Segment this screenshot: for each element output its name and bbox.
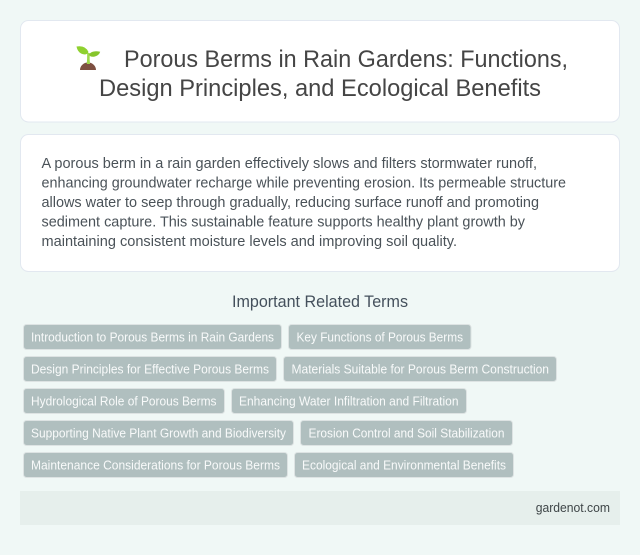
chip: materials: Materials Suitable for Porous Berm Construction (292, 362, 549, 376)
chip: water infiltration (232, 388, 466, 414)
footer source text: gardenot.com (536, 501, 610, 515)
chip: erosion control (300, 420, 512, 446)
title: Design Principles, and Ecological Benefits (99, 75, 541, 102)
chip: native plants (24, 420, 294, 446)
chip: hydrological role (24, 388, 224, 414)
title (99, 46, 568, 102)
chip: key functions (288, 324, 471, 350)
panel: description (20, 134, 620, 272)
icon: sprout (76, 46, 100, 70)
chip: design principles: Design Principles for Effective Porous Berms (31, 362, 269, 376)
panel: related term chips (24, 324, 556, 478)
description text: sediment capture. This sustainable feature supports healthy plant growth by (42, 214, 525, 230)
chip: erosion control: Erosion Control and Soil Stabilization (308, 426, 504, 440)
description text (42, 155, 566, 250)
chip: introduction (24, 324, 282, 350)
chip: water infiltration: Enhancing Water Infiltration and Filtration (239, 394, 458, 408)
description text: A porous berm in a rain garden effectively slows and filters stormwater runoff, (42, 155, 537, 172)
heading: important related terms: Important Related Terms (232, 293, 408, 311)
chip: native plants: Supporting Native Plant Growth and Biodiversity (31, 426, 287, 440)
chip: maintenance (24, 452, 288, 478)
title: Porous Berms in Rain Gardens: Functions, (124, 46, 568, 73)
chip: hydrological role: Hydrological Role of Porous Berms (31, 394, 216, 408)
chip: ecological benefits: Ecological and Environmental Benefits (302, 458, 506, 472)
footer (20, 491, 620, 525)
description text: enhancing groundwater recharge while preventing erosion. Its permeable structure (42, 174, 566, 192)
chip: key functions: Key Functions of Porous Berms (296, 330, 463, 344)
description text: allows water to seep through gradually, reducing surface runoff and promoting (42, 194, 539, 211)
chip: maintenance: Maintenance Considerations for Porous Berms (31, 458, 280, 472)
description text: maintaining consistent moisture levels and improving soil quality. (42, 233, 457, 250)
chip: design principles (24, 356, 276, 382)
panel: title card (20, 20, 620, 122)
chip: introduction: Introduction to Porous Berms in Rain Gardens (31, 330, 274, 344)
chip: ecological benefits (294, 452, 514, 478)
chip: materials (284, 356, 556, 382)
